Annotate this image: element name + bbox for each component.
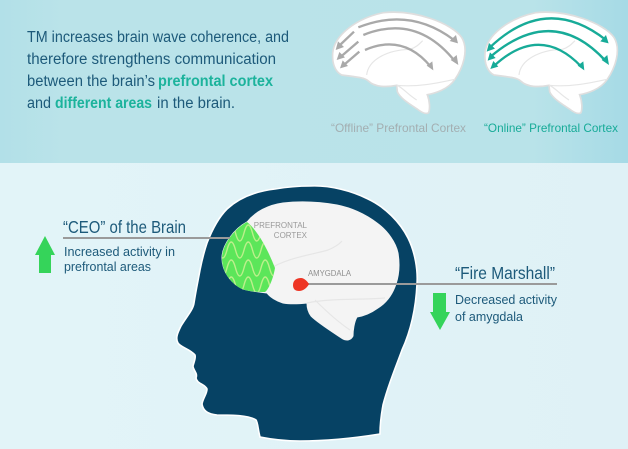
callout: Fire Marshall: of amygdala [455, 309, 524, 324]
brain fold lines [268, 241, 385, 330]
label: prefrontal cortex [254, 221, 308, 240]
callout: Fire Marshall: Decreased activity [455, 292, 557, 307]
label: prefrontal cortex: PREFRONTAL [254, 221, 308, 230]
intro text block: between the brain’s [27, 73, 155, 90]
intro text block: different areas [55, 95, 152, 112]
intro text block: in the brain. [157, 95, 235, 112]
head silhouette [177, 186, 417, 441]
intro text block: therefore strengthens communication [27, 51, 276, 68]
brain [222, 202, 399, 340]
callout: Fire Marshall [455, 263, 557, 324]
callout: Fire Marshall: “Fire Marshall” [455, 263, 555, 283]
icon: offline brain [333, 12, 465, 113]
caption: offline: “Offline” Prefrontal Cortex [331, 121, 466, 135]
callout: CEO of the Brain: “CEO” of the Brain [63, 217, 186, 237]
label: amygdala: AMYGDALA [308, 269, 352, 278]
intro text block: and [27, 95, 51, 112]
intro text block [27, 29, 289, 112]
icon: down arrow [430, 293, 450, 330]
panel: top band [0, 0, 628, 163]
callout: CEO of the Brain: Increased activity in [64, 244, 175, 259]
leader line: CEO [63, 237, 230, 239]
label: prefrontal cortex: CORTEX [274, 231, 308, 240]
callout: CEO of the Brain: prefrontal areas [64, 259, 151, 274]
intro text block: prefrontal cortex [158, 73, 273, 90]
leader line: Fire Marshall [306, 283, 557, 285]
caption: online: “Online” Prefrontal Cortex [484, 121, 618, 135]
intro text block: TM increases brain wave coherence, and [27, 29, 289, 46]
icon: online brain [485, 12, 617, 113]
callout: CEO of the Brain [63, 217, 186, 274]
icon: up arrow [35, 236, 55, 273]
prefrontal cortex highlight [222, 222, 275, 292]
amygdala marker [293, 278, 309, 291]
